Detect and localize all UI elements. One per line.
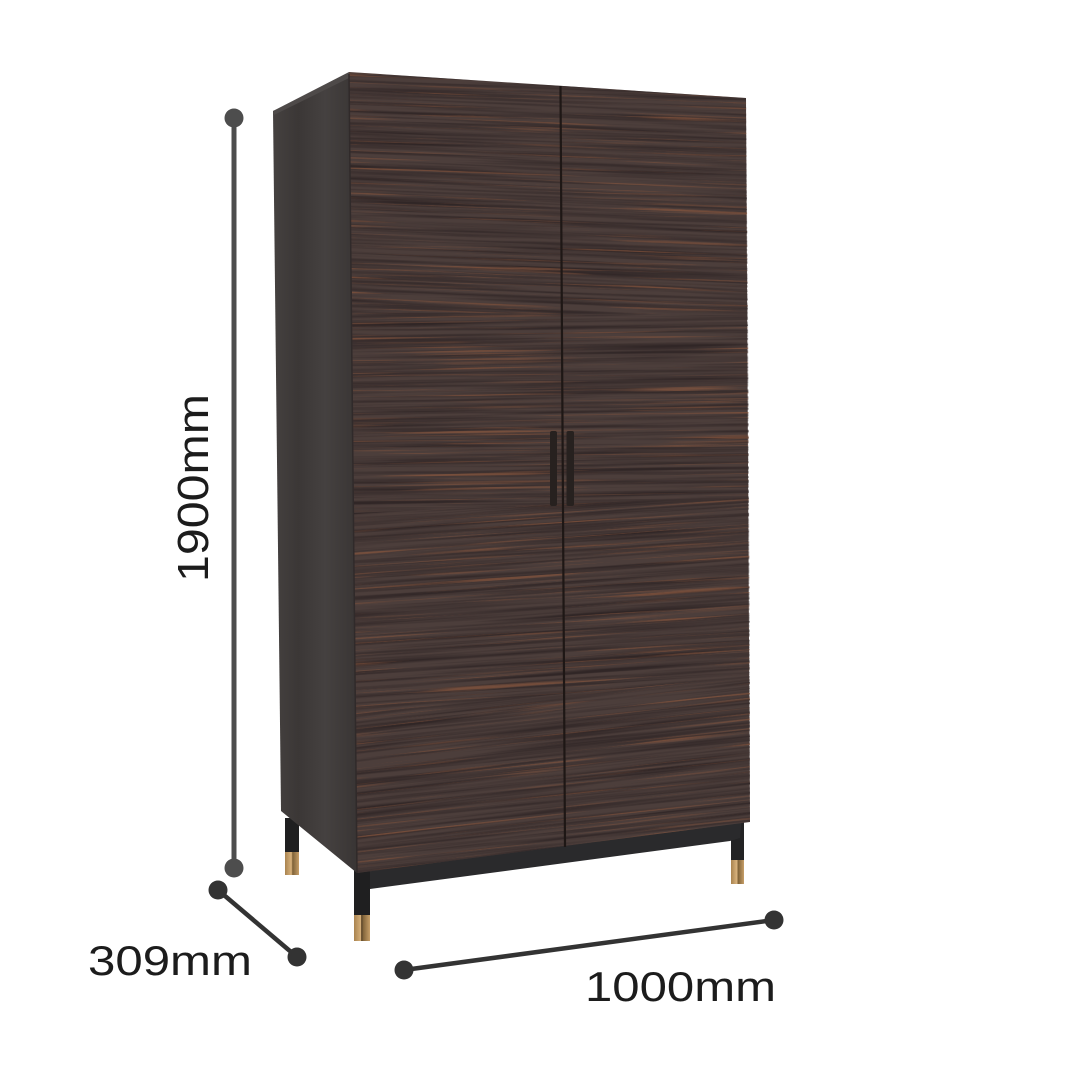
front leg xyxy=(354,870,370,941)
depth label: 309mm xyxy=(88,937,252,984)
door handles xyxy=(550,431,574,506)
depth dimension line xyxy=(208,880,306,966)
side panel xyxy=(273,77,357,873)
back right leg xyxy=(731,818,744,884)
width label: 1000mm xyxy=(585,963,776,1010)
height label: 1900mm xyxy=(169,394,218,582)
wood grain xyxy=(349,72,750,872)
back left leg xyxy=(285,818,299,875)
base rail xyxy=(357,815,742,889)
wardrobe xyxy=(273,72,750,941)
top edge xyxy=(273,72,351,115)
infographic: wardrobe with dimensions xyxy=(90,72,784,1002)
height dimension line xyxy=(224,108,244,878)
width dimension line xyxy=(394,910,784,980)
front panel xyxy=(348,72,750,873)
front left edge xyxy=(349,74,357,873)
door gap xyxy=(560,86,565,847)
